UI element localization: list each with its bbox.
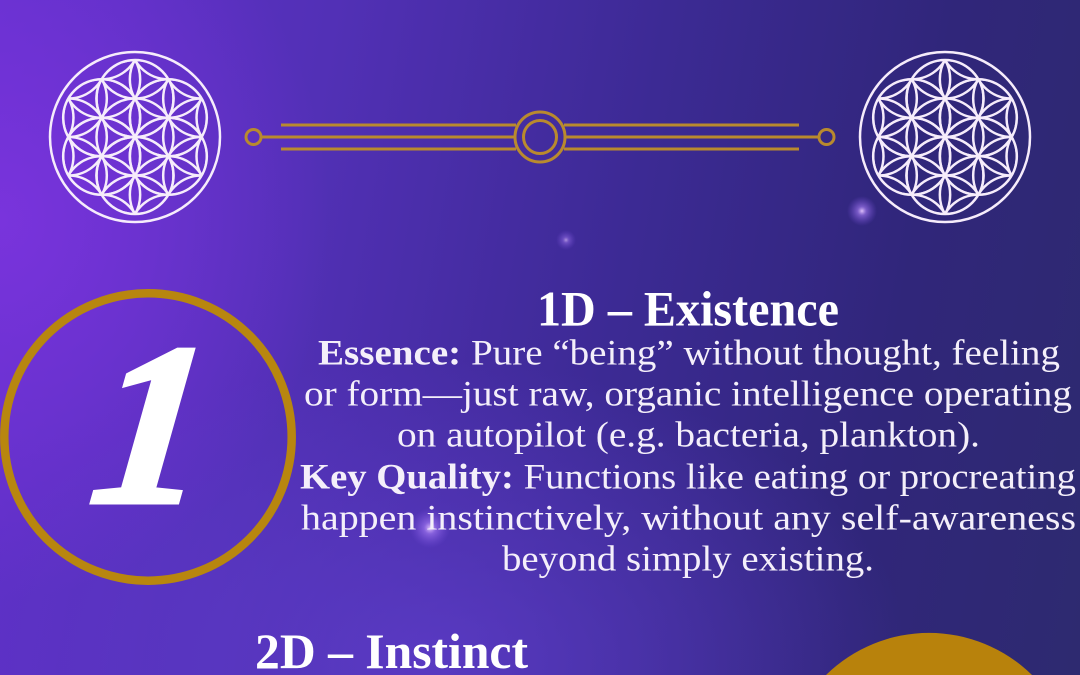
text block: 1D description: Essence: Pure “being” without thought, feeling bbox=[318, 332, 1060, 372]
text block: 1D description: happen instinctively, without any self-awareness bbox=[301, 498, 1076, 538]
icon: flower of life right bbox=[806, 2, 1080, 272]
icon: flower of life left bbox=[0, 2, 274, 272]
ornament: gold divider bbox=[246, 112, 834, 162]
text block: 1D description bbox=[300, 332, 1076, 578]
sparkle: upper right bbox=[847, 196, 877, 226]
text block: 1D description: Key Quality: Functions like eating or procreating bbox=[300, 456, 1076, 496]
sparkle: behind body text bbox=[410, 508, 450, 548]
text block: 1D description: on autopilot (e.g. bacteria, plankton). bbox=[397, 414, 980, 454]
number badge: 1: 1 bbox=[82, 297, 224, 552]
heading: 1D Existence: 1D – Existence bbox=[537, 280, 839, 336]
sparkle: upper centre bbox=[556, 230, 576, 250]
text block: 1D description: beyond simply existing. bbox=[502, 538, 874, 578]
text block: 1D description: or form—just raw, organic intelligence operating bbox=[304, 374, 1072, 414]
number badge: 1 bbox=[4, 293, 292, 581]
number badge: 2 (cropped gold circle) bbox=[826, 633, 1032, 675]
